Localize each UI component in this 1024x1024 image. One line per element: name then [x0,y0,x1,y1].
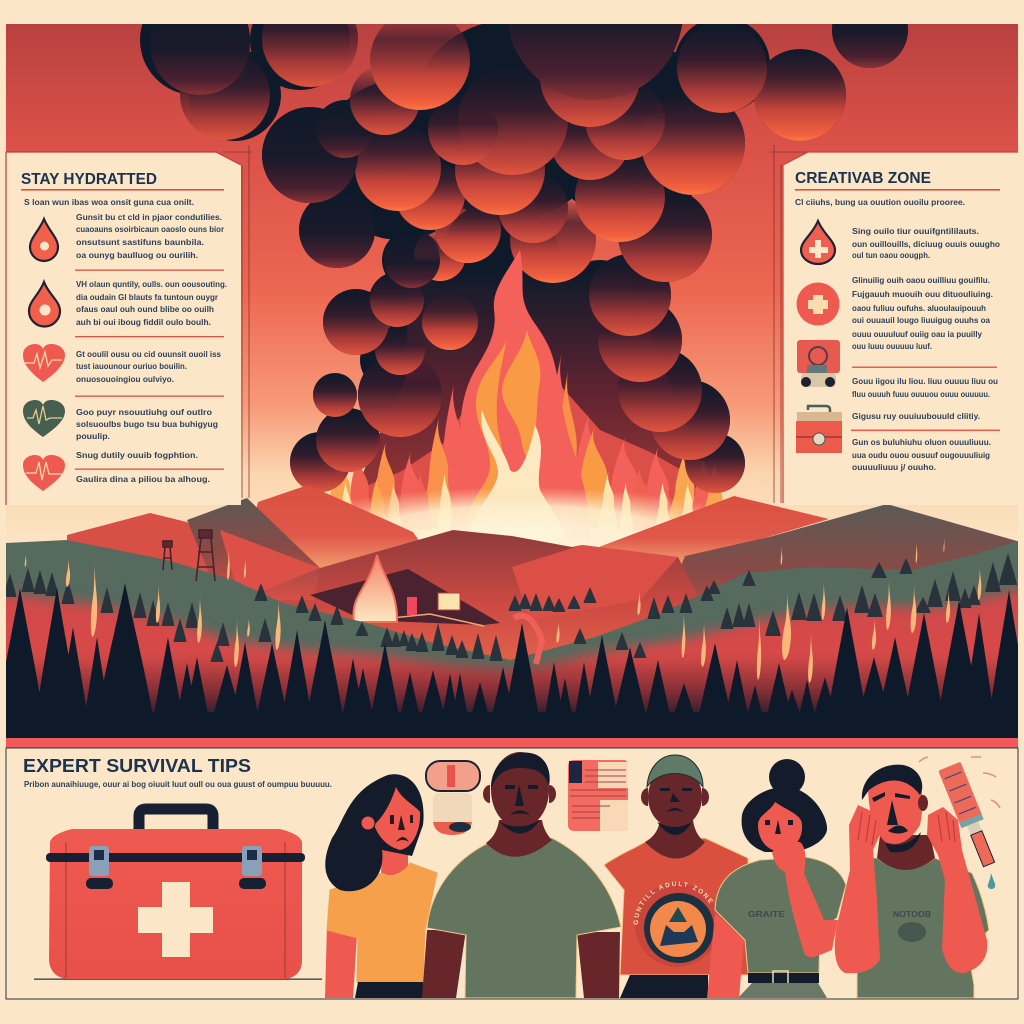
tip text 3 [852,377,998,399]
tip text 5: ouuuuliuuu j/ ouuho. [852,463,936,472]
icon: medical cross circle [796,282,840,326]
tip text 2: oaou fuliuu oufuhs. aluoulauipouuh [852,304,986,313]
tip text 2: ofaus oaul ouh ound blibe oo ouilh [76,305,214,314]
icon: water bottle [919,757,1000,889]
flame base glow [350,488,706,547]
icon: heart pulse 1 [23,344,65,382]
tip text 5 [852,438,991,472]
arms [422,930,620,998]
icon: water drop 1 [30,219,58,261]
shirt [604,838,750,975]
red centre peak [512,545,678,620]
smoke silhouette [140,0,908,493]
trousers [620,975,708,998]
tall watchtower [196,530,215,581]
red peak far left [67,513,208,572]
small watchtower [163,541,172,570]
facial features [765,820,793,834]
panel background [6,748,1018,999]
burning cabin [310,555,500,626]
neck [486,820,552,857]
head [491,752,549,828]
valley ground fill [276,600,314,610]
tip text 6: Gaulira dina a piliou ba alhoug. [76,475,210,484]
face [374,787,420,850]
right flame tongues [557,352,723,530]
facial features [657,788,692,835]
green forested hillside [6,540,1018,678]
shirt [327,863,437,982]
shirt [427,838,621,998]
heading: CREATIVAB ZONE [795,170,931,187]
arm [707,913,744,998]
divider [75,270,224,271]
panel: expert survival tips [6,748,1018,1000]
tip text 3: fluu ouuuh fuuu ouuuou ouuu ouuuuu. [852,390,990,399]
smoke plume and flames [140,24,908,547]
forest floor [152,712,815,721]
tip text 1 [852,227,1000,260]
tip text 2: VH olaun quntily, oulls. oun oousouting. [76,280,227,289]
panel top and left edge [783,152,1018,503]
kit handle [139,809,213,837]
ears [641,788,709,806]
tip text 5: uua oudu ouou ousuuf ougouuuliuig [852,451,990,460]
plume core behind flames [364,280,702,488]
centre ridge [314,530,698,660]
icon: water drop 2 [29,282,60,326]
head [648,766,702,828]
heading rule [795,189,1000,191]
tip text 3: Gt ooulil ousu ou cid ouunsit ouoil iss [76,350,222,359]
divider [75,396,224,397]
red lower slope [220,530,320,591]
torso [857,858,989,998]
tip text 3: onuosouoingiou oulviyo. [76,375,174,384]
tip text 4: pouulip. [76,432,110,441]
coral flame arch [514,616,542,664]
tip text 4 [76,408,218,441]
heading: EXPERT SURVIVAL TIPS [23,755,251,776]
tip text 1: oul tun oaou oougph. [852,251,930,260]
right arm and hand [927,807,987,973]
intro text: Pribon aunaihiuuge, ouur ai bog oiuuit Iuut oull ou oua guust of oumpuu buuuuu. [24,780,332,789]
tip text 2: auh bi oui iboug fiddil oulo boulh. [76,318,211,327]
water drop [988,873,995,889]
far red peak left [256,485,419,568]
tip text 4: solsuoulbs bugo tsu bua buhigyug [76,420,218,429]
tip text 2: ouu luuu ouuuuu luuf. [852,342,932,351]
tip text 1: Sing ouilo tiur ouuifgntililauts. [852,227,979,236]
arm [325,925,357,998]
tip text 4: Gigusu ruy ouuiuubouuld cliitiy. [852,412,980,421]
ear [361,816,375,830]
poles behind panels [222,145,806,503]
divider [75,468,224,470]
person: man wiping brow [835,765,989,998]
tip text 1: oa ounyg baulluog ou ourilih. [76,251,198,260]
cabin deck [398,613,484,627]
trousers [355,982,423,998]
ear [918,795,928,811]
fire mass [368,388,696,528]
red band above lower panel [6,738,1018,748]
kit strap [46,853,305,862]
hair [325,774,424,891]
tip text 2: oui ouuauil lougo liuuigug ouuhs oa [852,316,991,325]
right hand fingers [938,812,955,842]
icon: emergency pack [797,340,840,387]
foreground dark trees [6,583,1018,721]
person: man in green shirt [422,752,621,998]
neck [381,845,408,875]
hair [862,765,922,800]
cap [647,755,703,787]
panel background [783,152,1018,505]
kit cross [138,882,213,957]
shirt [715,857,846,973]
shirt badge: GUNTILL ADULT ZONE [634,882,714,925]
panel top and left edge [6,152,241,505]
hair and bun [742,759,827,852]
tip text 2 [76,280,227,327]
tip text 3 [76,350,222,384]
grey topped peak left [187,498,320,600]
icon: heart pulse 2 [23,400,65,437]
icon: first aid kit [34,809,322,980]
icon: blood drop with cross [801,221,835,264]
neck [645,820,705,858]
divider [852,366,997,368]
left hand fingers [858,812,876,845]
kit latches [86,846,266,889]
tip text 2: ouuu ouuuluuf ouiig oau ia puuilly [852,330,983,339]
shirt badge [634,882,718,967]
forest fire flames [25,537,981,683]
person: woman with hand over mouth [707,759,846,998]
tip text 1: oun ouillouills, diciuug ouuis ouugho [852,240,1000,249]
tip text 1: Gunsit bu ct cld in pjaor condutilies. [76,213,222,222]
cream flame core [476,410,556,520]
far red peak right [599,496,829,565]
icon: heart pulse 3 [23,455,65,491]
raised hand and forearm [772,842,838,957]
kit body [49,829,302,979]
motion marks [919,757,1000,808]
panel: creative zone [783,152,1018,505]
amber inner flames [472,330,540,507]
person: man in red shirt with badge [603,754,749,998]
sky [6,24,1018,554]
icon: bandage tube [426,761,480,835]
tip text 1: onsutsunt sastifuns baunbila. [76,238,204,247]
grey topped peak right [682,505,1017,596]
trousers [738,983,827,998]
red lower forest haze [6,582,1018,712]
belt buckle [773,971,788,984]
tip text 5: Gun os buluhiuhu oluon ouuuliuuu. [852,438,991,447]
tip text 2: dia oudain Gl blauts fa tuntoun ouygr [76,293,218,302]
cabin body [310,569,500,625]
tip text 2: Fujgauuh muouih ouu dituouliuing. [852,290,993,299]
face [758,802,802,852]
facial features [500,785,540,834]
icon: red first aid bag [796,406,842,453]
icon: info card [568,760,628,831]
shirt print [893,910,931,942]
wildfire scene [0,0,1024,760]
watchtowers [163,530,215,581]
intro text: Cl ciiuhs, bung ua ouution ouoilu prooree. [795,198,965,207]
head [868,777,922,844]
person: woman in orange shirt [325,774,437,998]
panel background [6,152,241,505]
tip text 3: tust iauounour ouriuo bouilin. [76,362,187,371]
tip text 1 [76,213,224,260]
hair [491,752,550,790]
tip text 4: Goo puyr nsouutiuhg ouf outlro [76,408,212,417]
kit ground line [34,978,322,980]
tip text 1: cuaoauns osoirbicaun oaoslo ouns bior [76,225,224,234]
left flame tongues [330,383,462,530]
divider [851,430,1000,431]
cabin flame [353,555,397,622]
heading: STAY HYDRATTED [21,171,157,188]
ears [483,785,556,803]
left arm and hand [835,805,882,973]
tip text 2: Glinuilig ouih oaou ouilliuu gouifilu. [852,276,990,285]
tip text 5: Snug dutily ouuib fogphtion. [76,451,198,460]
panel: stay hydrated [6,152,241,505]
cabin windows [407,597,417,615]
central coral flame [450,250,590,540]
small distant trees [4,553,1017,662]
tip text 3: Gouu iigou ilu liou. liuu ouuuu liuu ou [852,377,998,386]
belt [748,973,819,983]
divider [75,336,224,337]
tip text 2 [852,276,993,351]
intro text: S loan wun ibas woa onsit guna cua onilt. [24,198,194,207]
facial features [390,815,413,842]
shirt print: NOTOOB [893,910,931,919]
facial features [872,792,921,852]
heading rule [21,189,224,191]
neck [877,835,935,870]
lit smoke billows [150,0,908,493]
shirt print: GRAITE [748,910,786,919]
